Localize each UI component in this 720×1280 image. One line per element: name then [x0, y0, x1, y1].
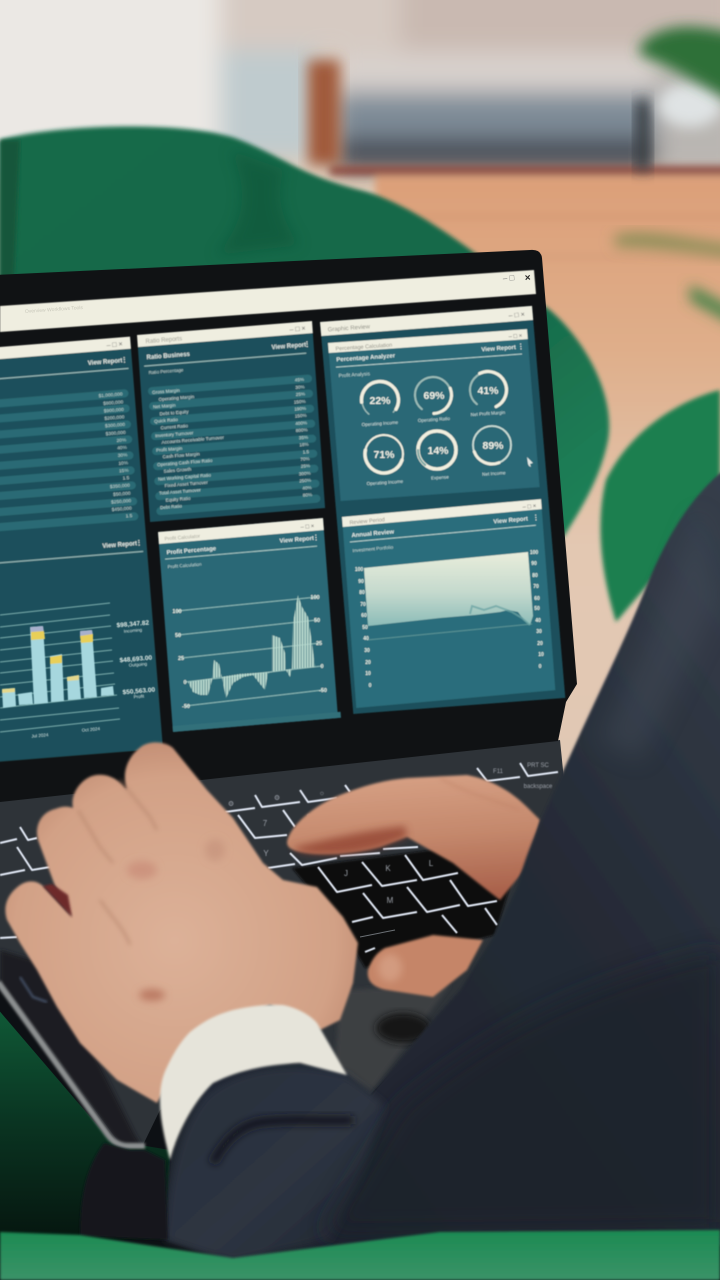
- screen title bar: – □: [503, 273, 515, 283]
- panel: ratio reports: ⋮: [303, 340, 311, 349]
- panel: profit calculator: [158, 518, 341, 732]
- key legends: L: [429, 859, 434, 868]
- row bars: [0, 389, 139, 535]
- axis labels: 30: [536, 629, 542, 635]
- row labels: Inventory Turnover: [155, 430, 194, 438]
- axis labels: 0: [320, 664, 324, 670]
- chart values: Jul 2024: [31, 732, 49, 739]
- key legends: [228, 763, 553, 905]
- panel: profit calculator: Profit Calculator: [164, 533, 201, 542]
- panel: left financial list: ⋮: [135, 539, 143, 547]
- gauge labels: Net Profit Margin: [471, 410, 506, 417]
- axis labels: 100: [172, 609, 182, 615]
- panel: profit calculator: – □ ×: [300, 524, 315, 531]
- row values: $50,000: [113, 490, 131, 498]
- screen title bar: ×: [524, 273, 531, 284]
- touchpad: [335, 985, 450, 1090]
- axis labels: 10: [365, 671, 371, 677]
- axis labels: 20: [365, 660, 371, 666]
- row values: 1.5: [125, 513, 133, 520]
- row values: $250,000: [111, 498, 132, 506]
- row values: $300,000: [105, 422, 126, 430]
- key legends: Y: [263, 849, 269, 858]
- gauge labels: Operating Income: [362, 420, 399, 427]
- row values: 400%: [295, 420, 307, 426]
- knuckle marks: [127, 839, 225, 1001]
- green chair foreground: [0, 1230, 720, 1280]
- row labels: Operating Cash Flow Ratio: [157, 458, 213, 467]
- dark lower left: [0, 950, 143, 1148]
- row values: $200,000: [104, 414, 125, 422]
- gauge values: 89%: [482, 440, 504, 452]
- base deck: [0, 740, 565, 1145]
- axis labels: 100: [530, 550, 538, 556]
- key legends: backspace: [524, 784, 553, 790]
- row values: 40%: [302, 485, 312, 491]
- axis labels: 100: [310, 595, 320, 601]
- bar chart: left panel: [0, 603, 156, 739]
- axis labels: 20: [537, 641, 543, 647]
- row labels: Sales Growth: [163, 467, 192, 474]
- key backlights: [0, 763, 558, 952]
- panel: annual review: ⋮: [532, 513, 540, 522]
- screen title bar: [0, 270, 536, 332]
- row values: 40%: [117, 445, 128, 452]
- axis labels: 30: [364, 648, 370, 654]
- row labels: Operating Margin: [158, 394, 195, 402]
- panel: profit calculator: Profit Calculation: [167, 561, 202, 569]
- axis labels: 25: [178, 656, 184, 662]
- axis labels: [172, 595, 327, 710]
- row values: 1.5: [122, 475, 130, 482]
- axis labels: 80: [359, 590, 365, 596]
- chart values: Oct 2024: [82, 726, 101, 733]
- panel: annual review: Review Period: [349, 517, 385, 526]
- panel: left financial list: View Report: [88, 358, 123, 367]
- axis labels: 25: [316, 641, 322, 647]
- row values: 1.5: [302, 449, 310, 454]
- axis labels: 40: [363, 636, 369, 642]
- screen title bar: Overview Workflows Tools: [25, 305, 84, 315]
- silver edge: [0, 982, 145, 1146]
- chart values: Incoming: [124, 627, 143, 634]
- row values: 25%: [301, 463, 310, 469]
- panel: percentage analyzer: Profit Analysis: [338, 371, 371, 379]
- panel: annual review: [342, 499, 555, 708]
- chart values: Outgoing: [129, 661, 148, 668]
- panel: profit calculator: Profit Percentage: [166, 546, 217, 556]
- axis labels: 0: [369, 683, 372, 689]
- panel: graphic review: – □ ×: [508, 312, 525, 320]
- row values: 250%: [299, 478, 311, 484]
- chart values: $98,347.82: [116, 620, 150, 629]
- axis labels: 70: [360, 602, 366, 608]
- row labels: Gross Margin: [152, 388, 180, 395]
- row labels: Debt to Equity: [159, 409, 189, 416]
- panel: left financial list: – □ ×: [106, 341, 123, 350]
- index finger shadow: [292, 826, 407, 854]
- axis labels: -50: [182, 704, 190, 710]
- axis labels: 80: [532, 573, 538, 579]
- row values: 10%: [118, 460, 129, 467]
- chart values: [31, 620, 156, 739]
- panel: percentage analyzer: Percentage Calculation: [335, 343, 393, 353]
- axis labels: 0: [539, 664, 542, 670]
- panel: ratio reports: Ratio Business: [146, 352, 191, 361]
- panel: left financial list: [0, 337, 163, 764]
- gauge labels: [362, 410, 506, 486]
- thumb: [368, 935, 483, 997]
- panel: profit calculator: View Report: [279, 536, 314, 545]
- green armchair right: [601, 390, 720, 622]
- finger gap: [43, 884, 72, 917]
- axis labels: 50: [175, 633, 181, 639]
- axis labels: 10: [538, 652, 544, 658]
- axis labels: 70: [533, 584, 539, 590]
- axis labels: 50: [314, 618, 320, 624]
- row values: 800%: [296, 427, 308, 433]
- key legends: K: [385, 864, 391, 873]
- row values: 18%: [299, 442, 309, 447]
- chart values: Profit: [133, 693, 145, 699]
- chart values: $50,563.00: [122, 687, 156, 696]
- row values: 20%: [116, 437, 127, 444]
- row values: [98, 392, 133, 521]
- area chart: annual review: [355, 550, 544, 689]
- plant: [615, 27, 720, 325]
- axis labels: 50: [362, 625, 368, 631]
- line chart: profit percentage: [172, 595, 327, 710]
- axis labels: 100: [355, 567, 363, 573]
- shirt cuff: [160, 1005, 347, 1160]
- key legends: 7: [263, 819, 268, 828]
- panel: percentage analyzer: Percentage Analyzer: [336, 353, 396, 364]
- row labels: Quick Ratio: [154, 417, 178, 424]
- sleeve crease: [213, 1120, 353, 1163]
- panel: ratio reports: Ratio Percentage: [149, 367, 184, 375]
- gauge values: [369, 385, 504, 461]
- laptop lid bezel: [0, 250, 577, 802]
- bars: [2, 688, 16, 708]
- panel: percentage analyzer: ⋮: [517, 342, 525, 351]
- axis labels: -50: [319, 688, 327, 694]
- key legends: 8: [307, 813, 312, 822]
- gauge values: 22%: [369, 395, 391, 407]
- row values: $1,000,000: [98, 392, 123, 399]
- suit sleeve and body: [80, 465, 720, 1262]
- panel: left financial list: View Report: [102, 541, 137, 550]
- row values: 15%: [119, 468, 130, 474]
- panel: ratio reports: Ratio Reports: [145, 336, 182, 345]
- row values: $350,000: [110, 483, 130, 490]
- chart values: $48,693.00: [119, 655, 153, 664]
- key legends: ⚙: [274, 794, 280, 802]
- background: blurred room: [0, 0, 720, 796]
- row values: $800,000: [103, 399, 124, 407]
- green chair lower left: [0, 1000, 170, 1240]
- row values: 80%: [303, 492, 312, 498]
- panel: percentage analyzer: [328, 329, 540, 501]
- dark keys lower right: [292, 838, 525, 968]
- axis labels: 50: [534, 606, 540, 612]
- row values: 150%: [294, 399, 306, 404]
- trousers: [80, 1143, 168, 1240]
- gauge values: 69%: [423, 390, 445, 402]
- axis labels: 60: [534, 596, 540, 602]
- gauge labels: Operating Income: [367, 479, 404, 486]
- gauge values: 71%: [373, 449, 395, 461]
- row labels: Profit Margin: [156, 446, 183, 453]
- panel: ratio reports: – □ ×: [289, 326, 306, 334]
- panel: graphic review: Graphic Review: [328, 324, 371, 333]
- laptop base and keyboard: [0, 740, 565, 1148]
- gauges: [355, 365, 516, 478]
- row values: 190%: [294, 406, 306, 412]
- key legends: J: [344, 869, 348, 878]
- row values: $900,000: [104, 407, 124, 414]
- row labels: Debt Ratio: [160, 504, 182, 510]
- row labels: Accounts Receivable Turnover: [161, 435, 225, 445]
- axis labels: 90: [531, 561, 537, 567]
- row values: 30%: [118, 452, 128, 459]
- panel: annual review: Investment Portfolio: [352, 545, 394, 553]
- gauge values: 41%: [477, 385, 499, 397]
- panel: percentage analyzer: View Report: [481, 345, 516, 353]
- row labels: Current Ratio: [160, 423, 189, 431]
- panel: graphic review: [320, 306, 565, 714]
- key legends: F11: [493, 769, 504, 775]
- panel: profit calculator: ⋮: [312, 533, 320, 542]
- panel: annual review: – □ ×: [522, 504, 537, 511]
- axis labels: 60: [361, 613, 367, 619]
- gauge labels: Net Income: [482, 470, 506, 477]
- row values: 25%: [296, 391, 305, 397]
- cursor: [527, 457, 533, 467]
- row values: 150%: [295, 413, 307, 419]
- green armchair behind laptop: [0, 126, 609, 600]
- row values: $450,000: [111, 506, 132, 513]
- row labels: Cash Flow Margin: [162, 451, 200, 459]
- row values: [292, 377, 313, 498]
- row labels: Net Margin: [153, 403, 176, 410]
- panel: left financial list: ⋮: [121, 356, 128, 364]
- panel: percentage analyzer: – □ ×: [508, 333, 523, 340]
- gauge values: 14%: [427, 445, 449, 457]
- row labels: Total Asset Turnover: [159, 488, 201, 496]
- key legends: ⚙: [228, 800, 234, 808]
- gauge labels: Expense: [431, 474, 449, 481]
- row values: 45%: [295, 377, 304, 383]
- left hand: [5, 742, 358, 1103]
- row labels: Equity Ratio: [165, 496, 191, 503]
- key legends: PRT SC: [527, 763, 550, 769]
- key legends: ☼: [319, 790, 325, 797]
- row values: 300%: [299, 471, 311, 476]
- axis labels: [355, 550, 544, 689]
- panel: ratio reports: View Report: [271, 343, 306, 351]
- row labels: Fixed Asset Turnover: [164, 480, 208, 488]
- finger shading: [78, 780, 157, 945]
- axis labels: 90: [358, 579, 364, 585]
- row bars: [148, 374, 321, 515]
- panel: annual review: Annual Review: [351, 529, 395, 539]
- right hand: [287, 775, 540, 997]
- axis labels: 40: [535, 618, 541, 624]
- row labels: Net Working Capital Ratio: [158, 472, 212, 482]
- axis labels: 0: [183, 680, 187, 686]
- key legends: M: [387, 896, 394, 905]
- panel: annual review: View Report: [493, 516, 528, 525]
- grid lines: [0, 603, 120, 732]
- row values: 70%: [300, 456, 310, 462]
- row labels: [152, 385, 229, 510]
- panel: ratio reports: [137, 321, 325, 522]
- row values: $300,000: [105, 430, 126, 437]
- gauge labels: Operating Ratio: [418, 416, 451, 423]
- row values: 30%: [295, 384, 305, 390]
- row values: 35%: [299, 435, 308, 440]
